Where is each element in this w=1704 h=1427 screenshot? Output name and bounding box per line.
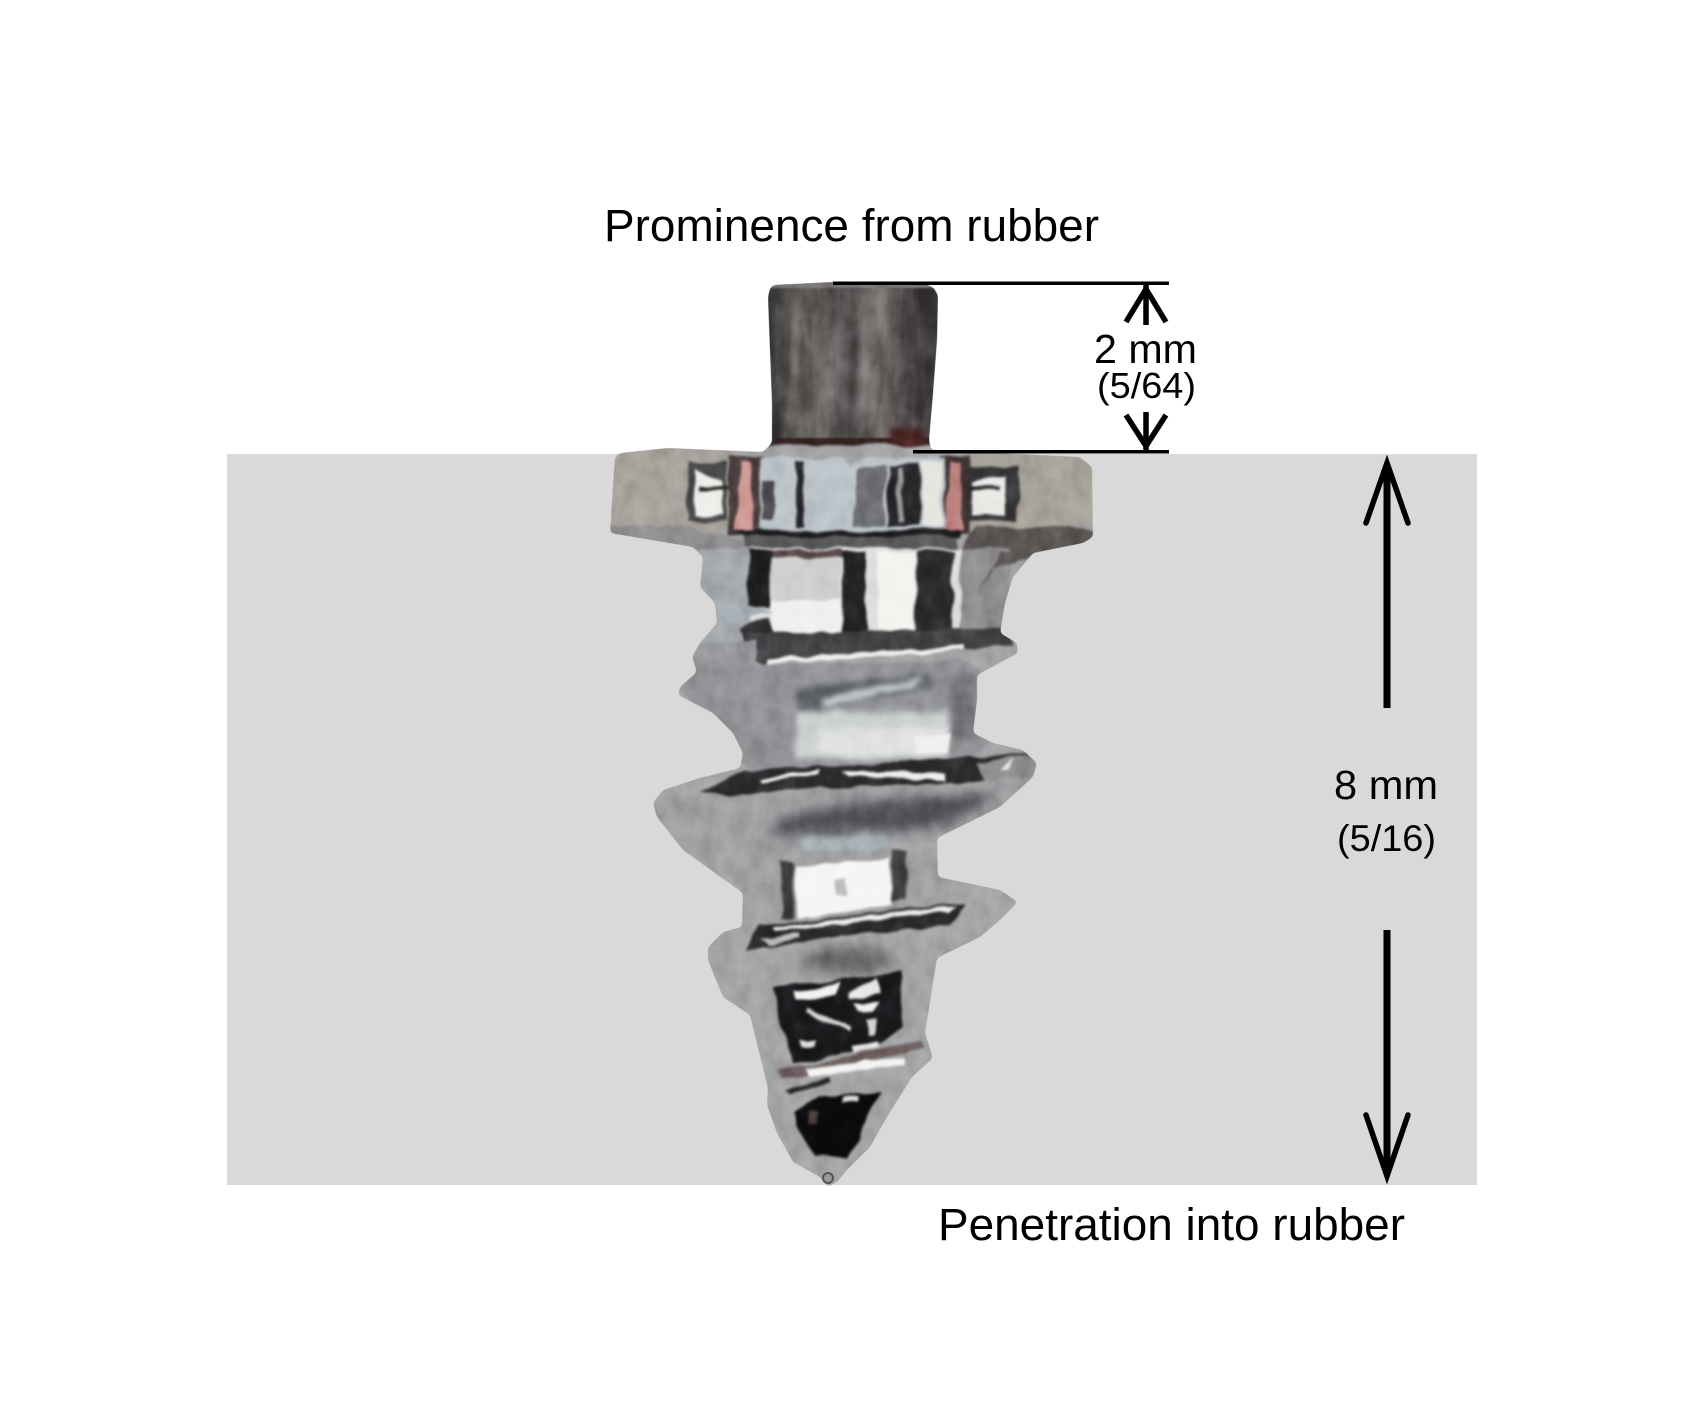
tip dark facet — [793, 1092, 882, 1158]
thread 1 — [690, 628, 1012, 668]
label: 2 mm: 2 mm — [1094, 326, 1197, 372]
heading: prominence from rubber: Prominence from rubber — [604, 200, 1099, 251]
thread 4 — [775, 1040, 925, 1096]
arrow: up to rubber surface — [1366, 463, 1408, 708]
arrow: up to pin top — [1126, 285, 1166, 325]
label: 8 mm: 8 mm — [1334, 762, 1438, 808]
icon: tire stud screw — [590, 275, 1110, 1195]
callout: prominence dimension — [833, 282, 1197, 454]
arrow: down to rubber surface — [1126, 412, 1166, 450]
label: 5/16: (5/16) — [1337, 818, 1436, 859]
section 2 body — [670, 660, 990, 770]
icon: stud tip point — [823, 1173, 833, 1183]
flank 2 shading — [734, 778, 1029, 852]
label: 5/64: (5/64) — [1097, 365, 1196, 406]
flange — [600, 448, 1105, 562]
shank with bright facets — [690, 548, 1045, 645]
metal grain overlay — [590, 445, 1110, 1195]
thread 2 — [700, 752, 1045, 795]
thread 3 — [744, 902, 966, 952]
top guide line — [833, 282, 1169, 285]
flank 3 shading — [802, 947, 894, 973]
arrow: down to stud tip — [1366, 930, 1408, 1176]
heading: penetration into rubber: Penetration into rubber — [938, 1199, 1405, 1250]
bottom guide line — [913, 450, 1169, 454]
body photo surface — [590, 445, 1110, 1195]
callout: penetration dimension — [1334, 463, 1438, 1176]
panel: rubber block — [227, 454, 1477, 1185]
pin photo surface — [768, 282, 938, 450]
section 4 dark facet — [773, 972, 903, 1065]
section 3 body — [778, 848, 910, 922]
